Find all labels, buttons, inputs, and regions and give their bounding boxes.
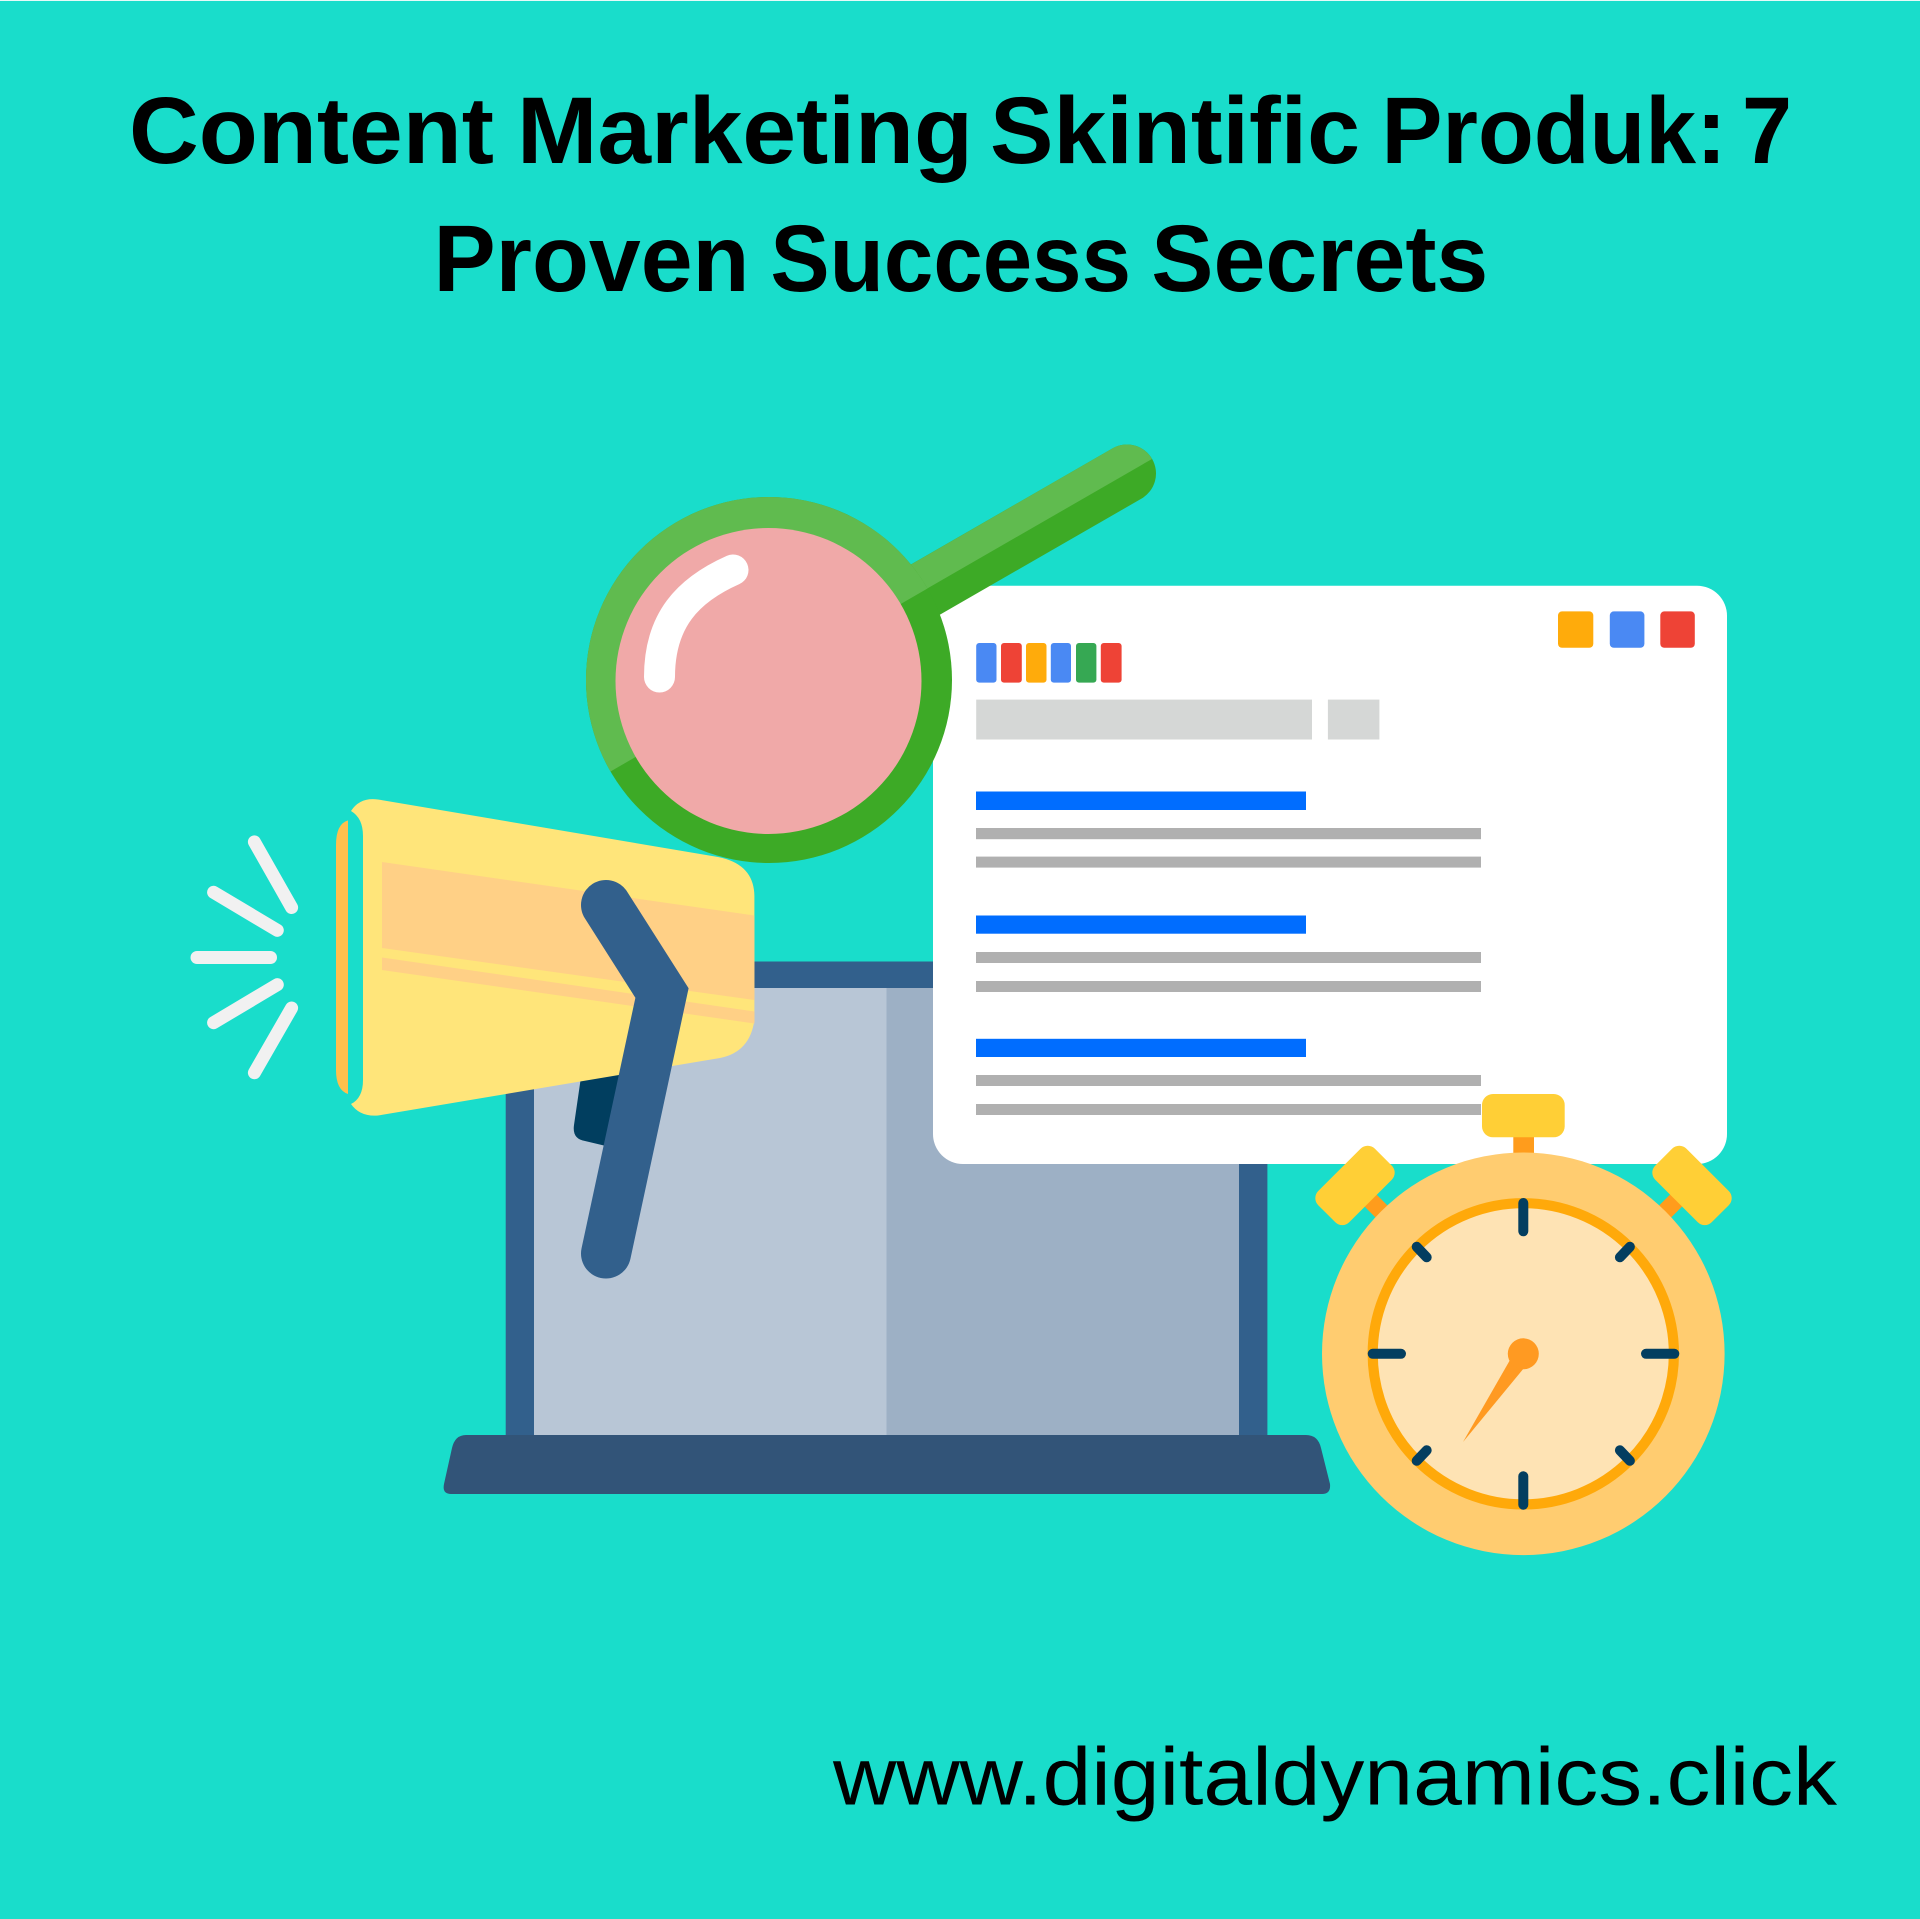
icon: stopwatch xyxy=(1311,1094,1736,1555)
search logo bars xyxy=(976,643,1122,683)
clock hand xyxy=(1463,1338,1539,1442)
search box xyxy=(976,700,1379,740)
icon: megaphone xyxy=(336,799,754,1254)
clock ticks xyxy=(1373,1203,1674,1505)
title: Marketing xyxy=(517,78,973,184)
title: Skintific xyxy=(990,78,1360,184)
result 1 xyxy=(976,792,1481,868)
website url: www.digitaldynamics.click xyxy=(832,1732,1838,1823)
window buttons xyxy=(1558,611,1695,648)
title: Secrets xyxy=(1151,206,1488,312)
title: Content xyxy=(129,78,494,184)
title: 7 xyxy=(1742,78,1792,184)
title: Success xyxy=(770,206,1131,312)
panel: search results window xyxy=(933,586,1727,1164)
icon: sound rays xyxy=(197,842,292,1073)
title xyxy=(129,78,1792,312)
icon: magnifying glass xyxy=(586,445,1152,863)
title: Proven xyxy=(434,206,750,312)
illustration: laptop xyxy=(444,962,1330,1494)
result 3 xyxy=(976,1039,1481,1115)
title: Produk: xyxy=(1382,78,1726,184)
result 2 xyxy=(976,916,1481,992)
